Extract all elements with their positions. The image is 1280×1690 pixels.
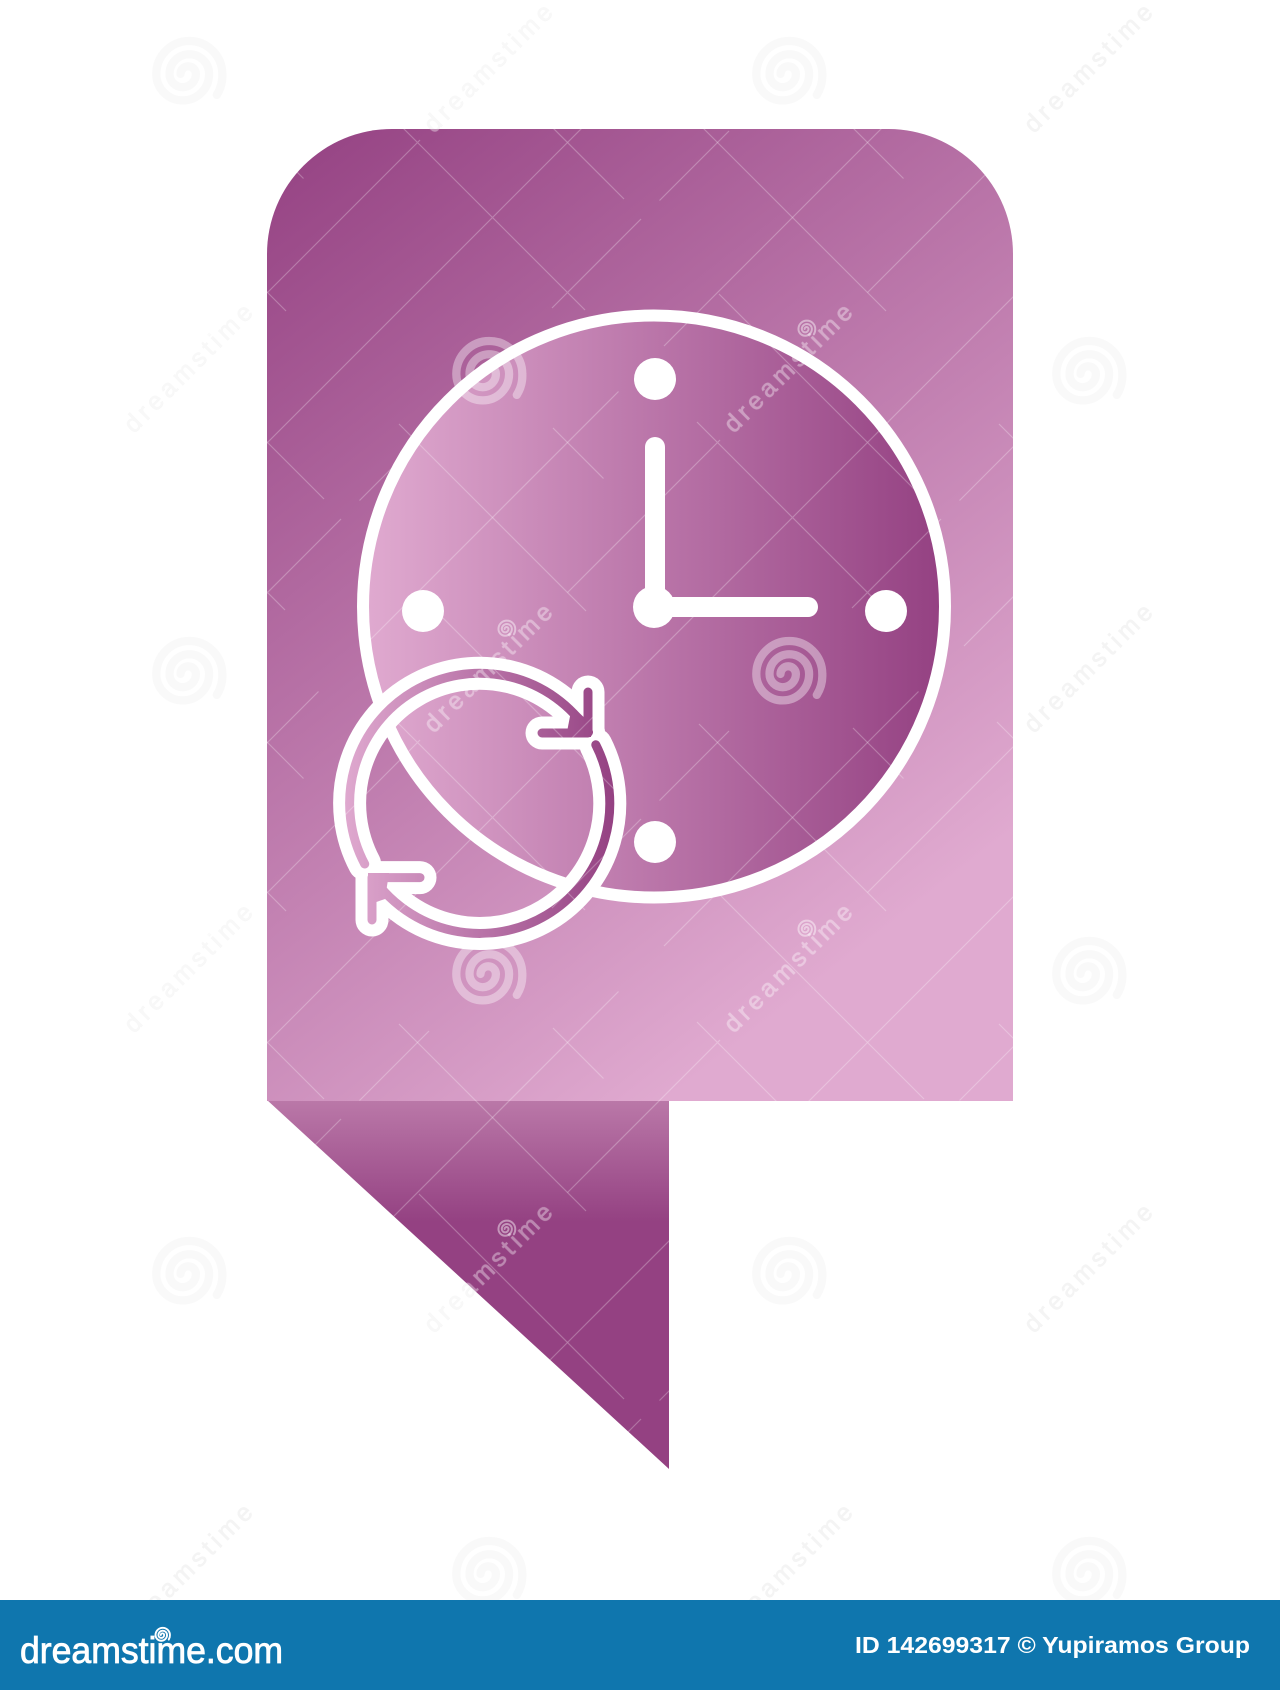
circular arrows icon [350,673,610,933]
footer logo: dreamstime.com [20,1630,283,1671]
map pin icon [267,129,1013,1469]
watermark words: dreamstime [418,0,558,138]
watermark words: dreamstime [118,298,258,438]
clock icon [363,316,945,898]
clock face [363,316,945,898]
watermark words: dreamstime [718,898,858,1038]
faint watermark on white background: dreamstime [1018,598,1158,738]
hour markers [402,358,907,863]
watermark words: dreamstime [418,1198,558,1338]
faint watermark on white background: dreamstime [118,298,258,438]
faint watermark on white background: dreamstime [1018,0,1158,138]
faint watermark on white background [118,0,1158,1638]
clock hands [633,447,808,628]
faint watermark on white background: dreamstime [718,1498,858,1638]
footer image id and credit: ID 142699317 © Yupiramos Group [855,1632,1250,1658]
footer bar [0,1600,1280,1690]
faint watermark on white background: dreamstime [1018,1198,1158,1338]
faint watermark on white background: dreamstime [418,1198,558,1338]
watermark spirals [456,341,822,1000]
arrows coloured core [350,673,610,933]
pin tail [267,1100,669,1469]
arrow heads fill [368,706,591,905]
watermark words [118,0,858,1338]
faint watermark on white background: dreamstime [118,898,258,1038]
watermark words: dreamstime [418,598,558,738]
watermark words: dreamstime [118,898,258,1038]
watermark small spiral marks [198,321,815,1236]
watermark words: dreamstime [718,298,858,438]
arrows white outline [350,673,610,933]
faint watermark on white background: dreamstime [418,0,558,138]
faint watermark on white background: dreamstime [118,1498,258,1638]
pin panel [267,129,1013,1101]
